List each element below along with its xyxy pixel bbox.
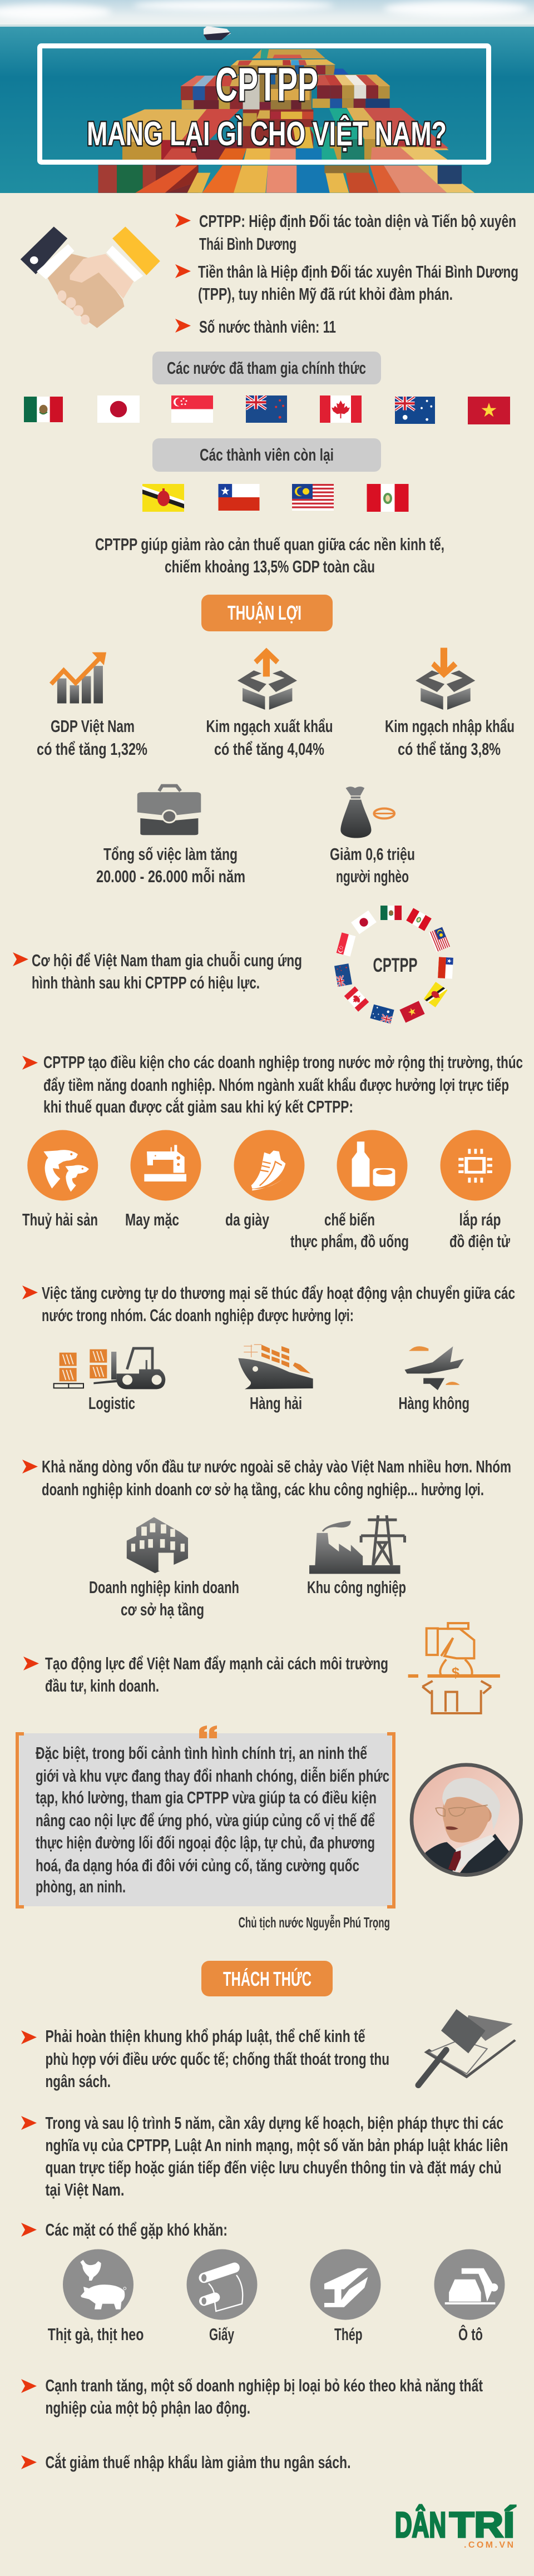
icon: growth chart	[51, 652, 106, 703]
heading: advantages: THUẬN LỢI	[228, 601, 301, 624]
stat: poverty: Giảm 0,6 triệu	[330, 844, 415, 864]
title frame	[40, 46, 488, 162]
quote text: tạp, khó lường, tham gia CPTPP vừa giúp ta có điều kiện	[36, 1788, 377, 1807]
bullet: budget	[21, 2452, 350, 2472]
export sector labels	[22, 1209, 510, 1251]
icon: export box	[238, 647, 297, 710]
quote text: nâng cao nội lực để ứng phó, vừa giúp củng cố vị thế để	[36, 1811, 375, 1830]
bullet: legal framework	[21, 2026, 389, 2091]
transport labels: Logistic	[88, 1393, 135, 1413]
icon: cargo plane	[404, 1346, 464, 1390]
bullet: budget: Cắt giảm thuế nhập khẩu làm giảm thu ngân sách.	[46, 2452, 350, 2472]
export sector labels: May mặc	[125, 1210, 179, 1229]
icon: industrial zone	[309, 1515, 404, 1574]
logo: Dan Tri: DÂN	[395, 2504, 446, 2545]
icon: paper rolls	[187, 2249, 257, 2320]
pill: remaining members: Các thành viên còn lại	[200, 445, 334, 464]
stat: poverty	[330, 844, 415, 886]
icon: microchip	[441, 1130, 511, 1200]
logo: Dan Tri: TRÍ	[449, 2505, 516, 2545]
icon: seafood	[27, 1130, 98, 1200]
stat: jobs	[96, 844, 245, 886]
transport labels: Hàng hải	[250, 1393, 302, 1413]
export sector labels: lắp ráp	[459, 1209, 501, 1229]
stat: GDP: có thể tăng 1,32%	[37, 739, 147, 759]
labels: investment sectors: cơ sở hạ tầng	[121, 1600, 204, 1619]
labels: investment sectors: Doanh nghiệp kinh doanh	[89, 1578, 239, 1597]
quote text	[36, 1743, 389, 1896]
stat: exports: Kim ngạch xuất khẩu	[206, 716, 333, 736]
bullet: implementation plan	[21, 2113, 508, 2199]
logo: Dan Tri	[395, 2504, 516, 2550]
dollar sign: $	[452, 1664, 460, 1681]
heading: challenges	[201, 1961, 333, 1996]
icon: briefcase	[137, 786, 201, 835]
bullet text: definition	[199, 211, 516, 254]
labels: affected sectors	[48, 2324, 483, 2344]
bullet: supply chain: hình thành sau khi CPTPP có hiệu lực.	[32, 973, 260, 992]
stat: poverty: người nghèo	[336, 867, 409, 886]
icon: money bag	[340, 787, 394, 838]
icon: car assembly	[434, 2249, 505, 2320]
bullet arrow	[175, 319, 191, 333]
stat: GDP	[37, 716, 147, 759]
icon: steel beam	[310, 2249, 380, 2320]
icon: bottle and can	[337, 1130, 407, 1200]
stat: jobs: Tổng số việc làm tăng	[103, 844, 238, 864]
quote text: hoá, đa dạng hóa đi đôi với củng cố, tăng cường quốc	[36, 1856, 359, 1875]
labels: affected sectors: Thịt gà, thịt heo	[48, 2325, 144, 2344]
bullet text: predecessor	[198, 262, 518, 304]
quotation mark	[199, 1725, 217, 1738]
heading: challenges: THÁCH THỨC	[223, 1967, 312, 1990]
bullet: difficulties: Các mặt có thể gặp khó khăn:	[46, 2220, 228, 2239]
bullet: legal framework: Phải hoàn thiện khung khổ pháp luật, thể chế kinh tế	[46, 2026, 365, 2046]
export sector labels: đồ điện tử	[449, 1232, 510, 1251]
stat: jobs: 20.000 - 26.000 mỗi năm	[96, 867, 245, 886]
bullet: transport: nước trong nhóm. Các doanh nghiệp được hưởng lợi:	[42, 1306, 354, 1325]
bullet: transport	[22, 1283, 515, 1325]
bullet: reform	[23, 1654, 388, 1695]
bullet: supply chain: Cơ hội để Việt Nam tham gia chuỗi cung ứng	[32, 951, 302, 970]
export sector labels: chế biến	[324, 1210, 375, 1229]
statement: tariff reduction: chiếm khoảng 13,5% GDP toàn cầu	[165, 557, 375, 576]
bullet text: members: Số nước thành viên: 11	[199, 317, 336, 337]
icon: logistics forklift	[54, 1344, 313, 1389]
bullet text: definition: Thái Bình Dương	[199, 234, 296, 254]
bullet: difficulties	[21, 2220, 228, 2239]
icon: investment into house	[408, 1623, 500, 1713]
flags: official members	[24, 395, 510, 424]
export sector labels: Thuỷ hải sản	[22, 1210, 98, 1229]
stat: imports: có thể tăng 3,8%	[398, 739, 501, 759]
flags: remaining members	[142, 484, 408, 512]
bullet arrow	[175, 214, 191, 228]
quote text: thực hiện đường lối đối ngoại độc lập, tự chủ, đa phương	[36, 1833, 375, 1852]
quote attribution: Chủ tịch nước Nguyễn Phú Trọng	[239, 1914, 390, 1931]
bullet: reform: đầu tư, kinh doanh.	[45, 1676, 159, 1695]
bullet: implementation plan: tại Việt Nam.	[46, 2180, 125, 2199]
flag ring: CPTPP members	[334, 906, 453, 1024]
quote text: phòng, an ninh.	[36, 1877, 126, 1896]
title	[87, 58, 447, 152]
export sector labels: thực phẩm, đồ uống	[290, 1232, 409, 1251]
flag ring: CPTPP members: CPTPP	[373, 955, 417, 976]
bullet: legal framework: ngân sách.	[46, 2071, 111, 2091]
pill: official members	[152, 352, 381, 384]
transport labels: Hàng không	[398, 1393, 469, 1413]
quote box	[17, 1725, 394, 1907]
icon: import box	[416, 647, 475, 710]
export sector labels: da giày	[225, 1210, 270, 1229]
labels: affected sectors: Ô tô	[458, 2324, 483, 2344]
icon: sewing machine	[130, 1130, 201, 1200]
stat: exports	[206, 716, 333, 759]
stat: imports	[385, 716, 515, 759]
bullet: competition: nghiệp của một bộ phận lao động.	[46, 2398, 250, 2417]
labels: investment sectors: Khu công nghiệp	[307, 1578, 406, 1597]
stat: GDP: GDP Việt Nam	[51, 716, 135, 736]
labels: investment sectors	[89, 1578, 406, 1619]
labels: affected sectors: Giấy	[209, 2325, 235, 2344]
labels: affected sectors: Thép	[334, 2325, 363, 2344]
pill: remaining members	[152, 438, 381, 472]
icon: shoe	[234, 1130, 305, 1200]
transport labels	[88, 1393, 469, 1413]
bullet: foreign investment	[22, 1457, 511, 1499]
quote text: Đặc biệt, trong bối cảnh tình hình chính trị, an ninh thế	[36, 1743, 368, 1763]
header photo: container ship at sea	[0, 0, 534, 193]
icon: chicken and pig	[63, 2249, 134, 2320]
heading: advantages	[201, 595, 333, 631]
icon: office building	[127, 1517, 188, 1573]
stat: exports: có thể tăng 4,04%	[214, 739, 324, 759]
bullet list: CPTPP definition	[175, 211, 518, 337]
logo: Dan Tri: .COM.VN	[464, 2540, 513, 2550]
title: CPTPP	[215, 58, 318, 111]
icon: gavel and law book	[418, 2009, 516, 2085]
bullet: reform: Tạo động lực để Việt Nam đẩy mạnh cải cách môi trường	[45, 1654, 388, 1673]
bullet: market expansion: khi thuế quan được cắt giảm sau khi ký kết CPTPP:	[43, 1096, 353, 1116]
statement: tariff reduction	[95, 535, 444, 576]
bullet: competition	[21, 2376, 483, 2417]
pill: official members: Các nước đã tham gia chính thức	[167, 358, 366, 378]
bullet arrow	[175, 264, 191, 278]
bullet text: predecessor: (TPP), tuy nhiên Mỹ đã rút khỏi đàm phán.	[198, 284, 453, 304]
bullet: market expansion	[22, 1052, 523, 1116]
bullet: legal framework: phù hợp với điều ước quốc tế; chống thất thoát trong thu	[46, 2049, 389, 2069]
bullet: supply chain	[13, 951, 302, 992]
quote text: giới và khu vực đang thay đổi nhanh chóng, diễn biến phức	[36, 1766, 389, 1786]
icon: handshake	[21, 226, 160, 328]
portrait	[412, 1765, 521, 1880]
